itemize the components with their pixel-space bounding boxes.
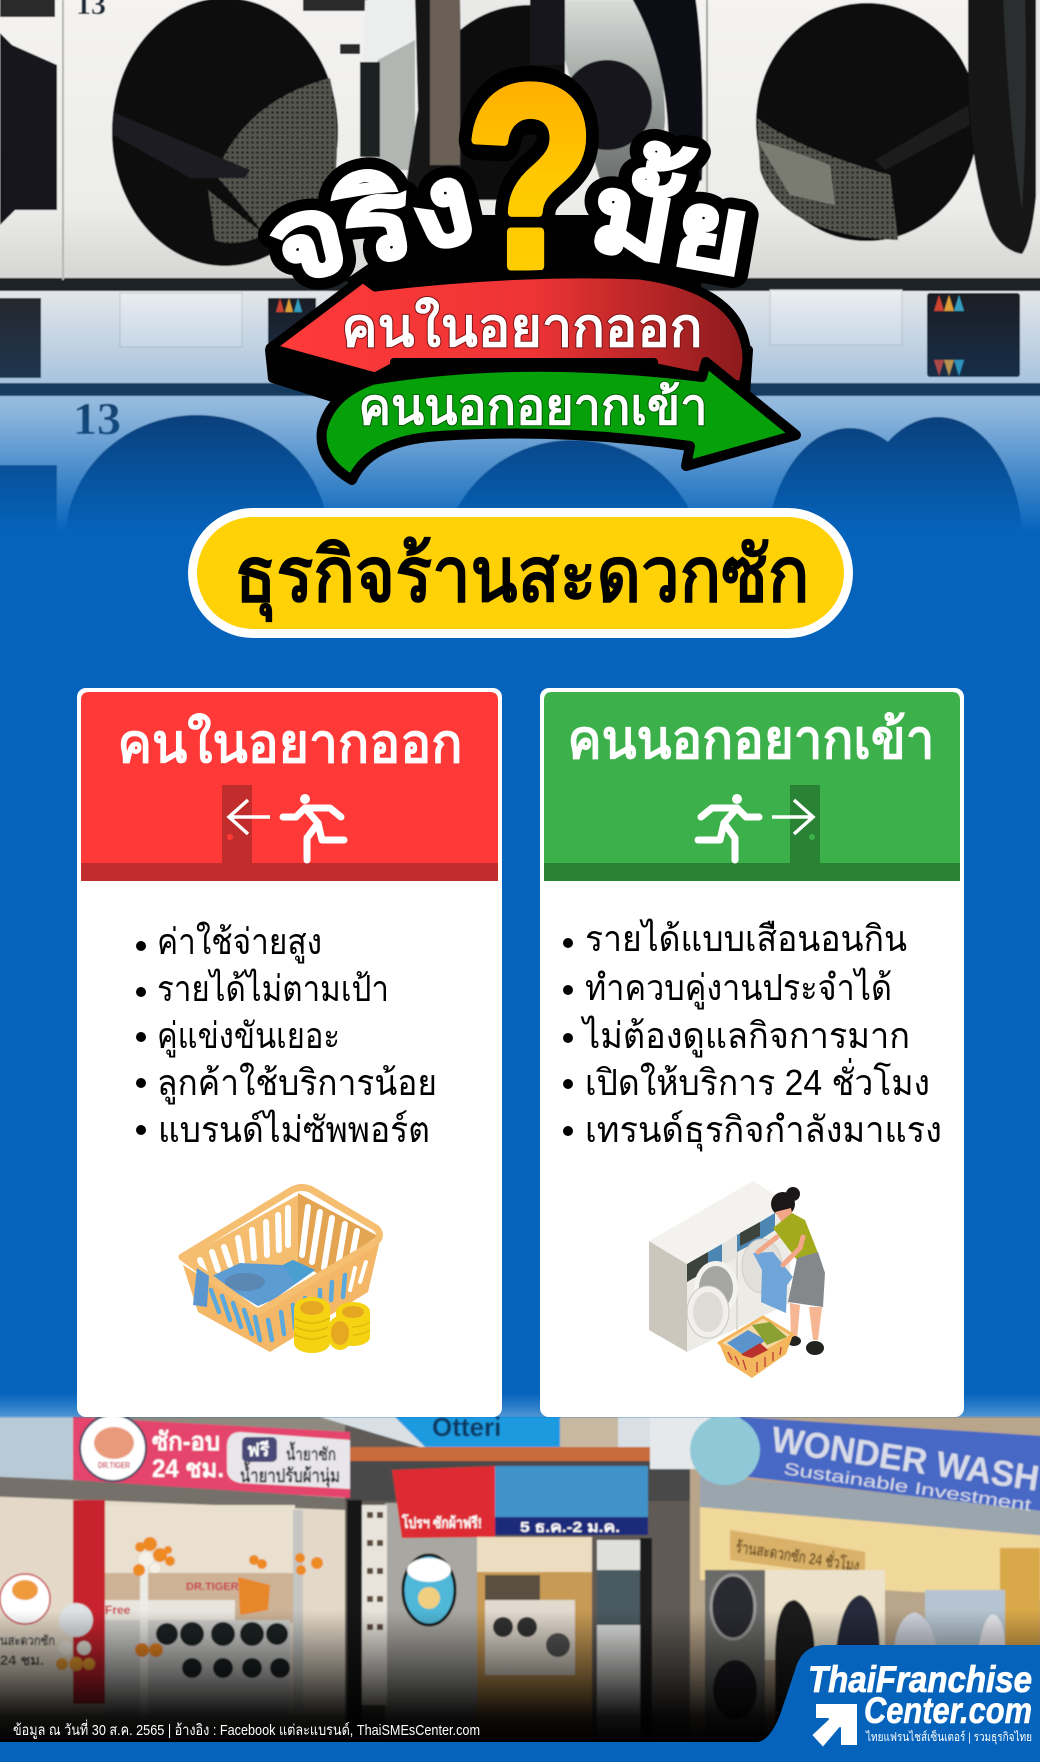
bullet list: ค่าใช้จ่ายสูง [157,921,322,964]
dryer number 13: 13 [73,393,121,444]
title logo: จริงมั้ย with arrows [257,32,796,480]
left shop: Dr. Tiger Laundry: ฟรี [247,1440,270,1460]
left shop: Dr. Tiger Laundry: DR.TIGER [186,1581,239,1593]
red arrow label: คนในอยากออก [342,296,702,358]
lower dryer doors [67,414,1021,524]
panel title: คนนอกอยากเข้า [568,710,934,770]
bullet list [136,921,437,1150]
bullet list: รายได้ไม่ตามเป้า [157,968,389,1009]
right shop: Wonder Wash: ร้านสะดวกซัก 24 ชั่วโมง [734,1535,861,1576]
storefront photo strip [0,1392,1040,1762]
shirt [753,1252,793,1313]
icon: left arrow [229,800,270,834]
logo arrow icon [811,1703,858,1748]
left shop: Dr. Tiger Laundry: 24 ชม. [152,1455,224,1483]
bullet list: คู่แข่งขันเยอะ [157,1015,340,1058]
bottom blue bar [0,1742,1040,1762]
right shop: Wonder Wash [648,1416,1040,1718]
icon: laundry basket with coins [182,1188,380,1353]
left shop: Dr. Tiger Laundry: นสะดวกซัก [0,1633,55,1648]
bullet list: รายได้แบบเสือนอนกิน [585,918,907,959]
middle shop: Otteri wash & dry: 5 ธ.ค.-2 ม.ค. [520,1519,620,1536]
control panels [0,293,1020,380]
bullet list: ไม่ต้องดูแลกิจการมาก [580,1015,910,1058]
green arrow [322,362,796,480]
word: จริง: จริง [257,139,485,307]
black slot between arrows [390,358,658,382]
bullet list: ทำควบคู่งานประจำได้ [585,967,892,1010]
left shop: Dr. Tiger Laundry: 24 ชม. [0,1652,44,1668]
word: จริง: จริง [257,139,485,307]
word: มั้ย: มั้ย [582,132,762,298]
question mark: ? [465,32,595,321]
basket rim [182,1188,380,1311]
left shop: Dr. Tiger Laundry: DR.TIGER [98,1461,130,1470]
left dryer drum [112,0,338,266]
coins [294,1297,370,1353]
bullet list: ลูกค้าใช้บริการน้อย [157,1062,437,1105]
word: มั้ย: มั้ย [582,132,762,298]
washer doors [694,1261,738,1315]
left shop: Dr. Tiger Laundry: น้ำยาปรับผ้านุ่ม [240,1461,340,1488]
photo: stacked laundry dryers [0,0,1040,524]
panel: คนในอยากออก [77,688,502,1417]
hanging cloth [193,1268,209,1307]
basket front walls [183,1265,270,1352]
left shop: Dr. Tiger Laundry: Free [105,1603,131,1617]
left dryer door edge [0,33,57,225]
icon: running person [283,794,344,860]
middle shop: Otteri wash & dry: Otteri [432,1412,501,1442]
woman [758,1187,825,1355]
middle shop: Otteri wash & dry [320,1416,690,1720]
headline pill: ธุรกิจร้านสะดวกซัก: ธุรกิจร้านสะดวกซัก [234,533,810,623]
red arrow [270,274,748,412]
right open door [968,0,1040,254]
icon: running person [698,794,759,860]
bullet list: แบรนด์ไม่ซัพพอร์ต [158,1109,430,1150]
basket back walls [185,1195,298,1295]
left shop: Dr. Tiger Laundry: น้ำยาซัก [286,1441,336,1464]
black backing [345,215,705,295]
green arrow label: คนนอกอยากเข้า [358,379,708,435]
panel header red [81,692,498,881]
question mark: ? [465,32,595,321]
left shop: Dr. Tiger Laundry [0,1416,352,1716]
panel title: คนในอยากออก [118,712,462,774]
right shop: Wonder Wash: Sustainable Investment [782,1459,1033,1515]
icon: right arrow [772,800,813,834]
panel: คนนอกอยากเข้า [540,688,964,1417]
illustration: woman at washing machines [649,1181,825,1378]
source credit: ข้อมูล ณ วันที่ 30 ส.ค. 2565 | อ้างอิง : Facebook แต่ละแบรนด์, ThaiSMEsCenter.com [13,1719,480,1739]
logo: ThaiFranchise Center.com [750,1645,1040,1762]
headline pill: ธุรกิจร้านสะดวกซัก [188,508,853,638]
bullet list: เทรนด์ธุรกิจกำลังมาแรง [585,1109,942,1152]
bullet list: เปิดให้บริการ 24 ชั่วโมง [585,1058,930,1103]
bullet list [563,918,942,1152]
washer bodies [687,1205,790,1352]
dark gradient over photos [0,1610,1040,1742]
left shop: Dr. Tiger Laundry: ซัก-อบ [152,1428,220,1456]
small basket [719,1317,793,1378]
panel header green [544,692,960,881]
centre open door [360,0,703,200]
washer control strips [687,1252,708,1282]
right dryer drum [756,3,978,241]
blue fade over photo [0,290,1040,532]
cloth in basket [210,1260,315,1306]
middle shop: Otteri wash & dry: โปรฯ ซักผ้าฟรี! [401,1513,482,1532]
